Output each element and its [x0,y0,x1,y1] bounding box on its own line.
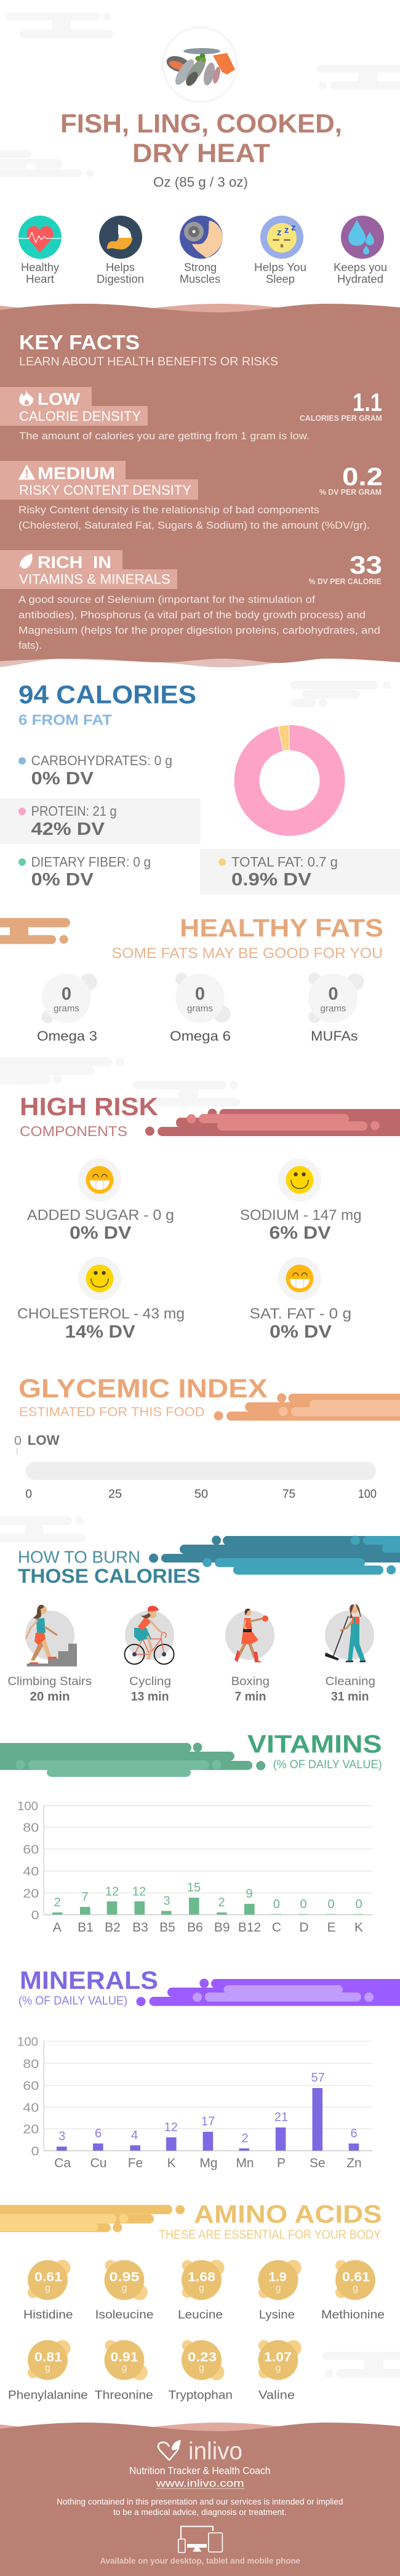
fact: low calorie density: CALORIES PER GRAM [300,414,382,423]
gauge axis: 100 [358,1488,377,1501]
bar chart: minerals: 6 [95,2127,102,2140]
panel: calories [0,680,400,895]
benefit icons row [18,216,387,285]
risk: added sugar: 0% DV [70,1224,132,1243]
amino: phenylalanine: g [45,2363,50,2373]
bar chart: minerals: Se [310,2156,326,2170]
bar chart: vitamins: C [272,1920,281,1935]
macro: dietary fiber: DIETARY FIBER: 0 g [31,854,151,869]
heading: high risk [20,1092,158,1139]
bar chart: vitamins: 7 [81,1890,89,1904]
fat: omega 3: grams [54,1004,79,1014]
bar chart: minerals: P [277,2156,286,2170]
bar chart: minerals: 4 [131,2129,138,2142]
icon: hydrated: Keeps you [334,261,387,274]
macro: protein [0,798,201,844]
bar chart: vitamins: B12 [238,1920,261,1935]
fact: medium risky content density: MEDIUM [38,463,115,483]
fat: omega 3: 0 [62,984,71,1004]
macro: total fat [200,849,400,895]
heading: vitamins [247,1729,382,1771]
bar chart: vitamins: 12 [132,1885,146,1898]
panel: amino acids [0,2200,385,2402]
fact: low calorie density [0,387,382,442]
exercise: boxing: Boxing [231,1675,270,1688]
bar chart: minerals: 100 [17,2036,38,2049]
bar chart: minerals [17,2036,372,2170]
risk: saturated fat [250,1257,351,1342]
fact: medium risky content density: 0.2 [342,462,383,490]
fact: rich in vitamins and minerals: A good source of Selenium (important for the stimulation of [18,595,315,606]
amino: tryptophan: g [199,2363,204,2373]
exercise: cleaning: Cleaning [326,1675,375,1688]
tagline: Nutrition Tracker & Health Coach [129,2465,271,2476]
heading: amino acids: AMINO ACIDS [194,2200,382,2228]
heading: how to burn: HOW TO BURN [18,1548,140,1567]
disclaimer: to be a medical advice, diagnosis or treatment. [113,2508,287,2517]
bar chart: vitamins: 9 [246,1887,253,1901]
heading: healthy fats: HEALTHY FATS [180,914,383,942]
amino: phenylalanine: Phenylalanine [8,2389,88,2402]
amino: threonine: 0.91 [111,2350,138,2365]
bar chart: vitamins: B2 [105,1920,121,1935]
amino: isoleucine: 0.95 [110,2270,140,2285]
amino: histidine: Histidine [23,2309,73,2322]
heading: high risk: HIGH RISK [20,1092,158,1121]
heading decoration [137,1979,400,2006]
bar chart: vitamins: A [53,1920,62,1935]
amino: histidine: g [45,2283,50,2293]
fact: rich in vitamins and minerals: RICH IN [38,553,111,572]
bar chart: minerals: Ca [54,2156,71,2170]
heading: 94 calories: 94 CALORIES [18,680,196,709]
bar chart: vitamins: D [299,1920,309,1935]
amino: isoleucine: Isoleucine [95,2309,154,2322]
bar chart: minerals: Fe [128,2156,143,2170]
risk: sodium: 6% DV [269,1224,331,1243]
heading: key facts: LEARN ABOUT HEALTH BENEFITS OR RISKS [19,356,278,368]
icon: digestion: Helps [106,261,135,274]
fact: low calorie density: The amount of calories you are getting from 1 gram is low. [19,431,310,442]
title [60,109,342,168]
risk: saturated fat: SAT. FAT - 0 g [250,1306,351,1322]
amino: methionine [321,2260,385,2322]
heading: vitamins: VITAMINS [247,1729,382,1758]
risk: cholesterol [17,1257,185,1342]
heading decoration [0,918,70,944]
panel: how to burn those calories [7,1535,400,1704]
macro: carbohydrates [18,753,172,789]
risk: added sugar [27,1158,174,1243]
bar chart: minerals: 0 [31,2145,39,2158]
fact: medium risky content density: % DV PER GRAM [319,488,382,497]
fact: low calorie density: 1.1 [353,388,382,416]
macro: carbohydrates: CARBOHYDRATES: 0 g [31,753,172,768]
macro: total fat: 0.9% DV [231,870,312,890]
exercise: boxing: 7 min [234,1690,266,1704]
heading: how to burn [18,1548,201,1587]
bar chart: vitamins: 0 [273,1898,280,1911]
title: FISH, LING, COOKED, [60,109,342,139]
panel: high risk components [17,1092,400,1342]
heading decoration [149,1535,400,1575]
amino: threonine: Threonine [95,2389,153,2402]
fact: rich in vitamins and minerals [0,550,382,651]
heading: minerals: MINERALS [20,1966,158,1994]
gauge axis: 75 [282,1488,295,1501]
heading decoration [214,1394,400,1421]
amino: tryptophan: Tryptophan [169,2389,233,2402]
bar chart: minerals: K [167,2156,176,2170]
amino: phenylalanine [8,2340,88,2402]
heading: high risk: COMPONENTS [20,1123,127,1139]
bar chart: vitamins: B9 [214,1920,230,1935]
exercise: cleaning: 31 min [331,1690,369,1704]
panel: vitamins [0,1729,382,1935]
fact: medium risky content density [0,461,383,531]
header image: plate of fish [162,27,238,102]
icon: warning triangle [18,465,35,479]
icon: sleep: z [291,222,295,233]
bar chart: vitamins: 0 [31,1909,39,1922]
disclaimer [57,2497,343,2517]
bar chart: vitamins: B5 [159,1920,175,1935]
exercise: climbing stairs: 20 min [30,1690,70,1704]
fact: rich in vitamins and minerals: Magnesium (helps for the proper digestion proteins, carbohydrates, and [18,625,380,636]
donut chart [247,725,332,823]
bar chart: minerals: 3 [58,2130,65,2143]
bar chart: vitamins: 2 [218,1896,225,1909]
bar chart: minerals: Mn [236,2156,254,2170]
risk: added sugar: ADDED SUGAR - 0 g [27,1207,174,1224]
bar chart: vitamins: K [354,1920,363,1935]
bar chart: minerals: Cu [90,2156,106,2170]
macro: carbohydrates: 0% DV [31,769,94,789]
amino: isoleucine: g [122,2283,127,2293]
heading: 94 calories [18,680,196,729]
heading: glycemic index [18,1374,268,1420]
amino: tryptophan [169,2340,233,2402]
exercise: cycling: Cycling [129,1675,171,1688]
bar chart: vitamins: 100 [17,1800,38,1813]
bar chart: vitamins: 0 [327,1898,335,1911]
amino: lysine: 1.9 [268,2270,287,2285]
amino: methionine: g [353,2283,358,2293]
macro: total fat: TOTAL FAT: 0.7 g [231,854,338,869]
heading: minerals: (% OF DAILY VALUE) [18,1995,127,2008]
fact: rich in vitamins and minerals: fats). [18,640,42,651]
exercise: cycling: 13 min [131,1690,169,1704]
heading: key facts: KEY FACTS [19,331,140,354]
risk: saturated fat: 0% DV [270,1322,332,1342]
amino: leucine: g [199,2283,204,2293]
amino: histidine [23,2260,73,2322]
bar chart: vitamins: 0 [355,1898,362,1911]
bar chart: minerals: 20 [23,2123,39,2137]
heading: vitamins: (% OF DAILY VALUE) [273,1758,382,1771]
bar chart: vitamins: 2 [54,1896,61,1909]
bar chart: minerals: 17 [201,2115,215,2129]
heading: amino acids: THESE ARE ESSENTIAL FOR YOUR BODY [159,2229,381,2242]
amino: valine [258,2340,302,2402]
macro: protein: 42% DV [31,819,105,839]
exercise: boxing [225,1609,274,1704]
logo: inlivo [158,2438,242,2465]
icon: sleep: z [284,225,289,235]
gauge axis: 25 [108,1488,122,1501]
icon: flame [19,390,33,406]
gauge axis: 50 [194,1488,208,1501]
heading decoration [145,1109,400,1136]
macro: dietary fiber: 0% DV [31,870,94,890]
amino: leucine: 1.68 [188,2270,215,2285]
risk: sodium [240,1158,362,1243]
icon: sleep: Helps You [254,261,306,274]
amino: leucine: Leucine [178,2309,223,2322]
icon: digestion [97,216,144,285]
amino: valine: g [276,2363,281,2373]
fat: mufas [308,973,364,1044]
exercise: climbing stairs: Climbing Stairs [7,1675,92,1688]
panel: healthy fats [0,914,383,1044]
exercise: cleaning [325,1604,375,1704]
panel: minerals [17,1966,400,2170]
gauge marker: 0 [14,1434,22,1448]
icon: leaf [20,554,32,569]
amino: tryptophan: 0.23 [188,2350,217,2365]
icon: hydrated: Hydrated [337,273,383,285]
bar chart: minerals: 60 [23,2079,39,2093]
amino: threonine: g [122,2363,127,2373]
amino: valine: Valine [258,2389,295,2402]
fact: rich in vitamins and minerals: VITAMINS & MINERALS [19,572,170,587]
bar chart: vitamins: 20 [23,1887,39,1901]
bar chart: vitamins: 80 [23,1821,39,1835]
bar chart: vitamins: 15 [187,1881,201,1895]
amino: phenylalanine: 0.81 [34,2350,62,2365]
fact: low calorie density: LOW [38,389,81,408]
icon: healthy heart: Healthy [21,261,59,274]
footer [0,2423,400,2576]
risk: cholesterol: 14% DV [65,1322,135,1342]
heading: 94 calories: 6 FROM FAT [18,712,112,729]
gauge marker [14,1432,60,1455]
website link: www.inlivo.com [155,2477,244,2489]
gauge bar [26,1462,376,1480]
heading: minerals [18,1966,158,2008]
icon: sleep: Sleep [266,273,295,285]
logo: inlivo: inlivo [188,2438,242,2465]
gauge axis [26,1488,377,1501]
fat: omega 6: grams [187,1004,213,1014]
amino: threonine [95,2340,153,2402]
heading: how to burn: THOSE CALORIES [18,1565,201,1587]
heading: key facts [19,331,278,368]
bar chart: vitamins: 12 [105,1885,119,1898]
bar chart: minerals: 12 [164,2121,178,2134]
fact: rich in vitamins and minerals: antibodies), Phosphorus (a vital part of the body growth process) and [18,610,366,621]
panel: key facts [0,304,400,667]
macro: protein: PROTEIN: 21 g [31,803,117,819]
availability note: Available on your desktop, tablet and mobile phone [100,2556,300,2566]
fact: rich in vitamins and minerals: 33 [350,551,382,579]
bar chart: minerals: 21 [274,2111,288,2124]
amino: valine: 1.07 [264,2350,292,2365]
bar chart: minerals: Mg [199,2156,218,2170]
bar chart: vitamins [17,1800,372,1935]
amino: methionine: Methionine [321,2309,385,2322]
bar chart: minerals: 57 [311,2071,325,2085]
gauge marker: LOW [28,1432,60,1448]
fact: medium risky content density: (Cholesterol, Saturated Fat, Sugars & Sodium) to the amount (%DV/gr). [18,520,370,531]
amino: leucine [178,2260,225,2322]
bar chart: minerals: 6 [350,2127,358,2140]
bar chart: vitamins: 60 [23,1843,39,1857]
fact: medium risky content density: RISKY CONTENT DENSITY [19,482,191,498]
fat: mufas: MUFAs [311,1028,358,1044]
fat: mufas: grams [320,1004,346,1014]
macro: dietary fiber [18,854,151,890]
heading: amino acids [159,2200,382,2242]
bar chart: minerals: 40 [23,2101,39,2115]
bar chart: minerals: 80 [23,2058,39,2071]
bar chart: vitamins: 0 [300,1898,307,1911]
heading decoration [0,2205,185,2232]
risk: sodium: SODIUM - 147 mg [240,1207,362,1224]
icon: strong muscles [180,216,223,285]
icon: healthy heart: Heart [26,273,54,285]
exercise: climbing stairs [7,1605,92,1704]
heading: healthy fats [112,914,383,962]
fat: mufas: 0 [328,984,338,1004]
panel: glycemic index [14,1374,400,1501]
amino: histidine: 0.61 [34,2270,62,2285]
bar chart: minerals: 2 [241,2132,249,2145]
amino: lysine: Lysine [259,2309,295,2322]
bar chart: vitamins: E [327,1920,336,1935]
bar chart: vitamins: B3 [132,1920,148,1935]
exercise: cycling [124,1606,174,1704]
risk: cholesterol: CHOLESTEROL - 43 mg [17,1306,185,1322]
fat: omega 6 [170,973,231,1044]
amino: methionine: 0.61 [342,2270,370,2285]
icon: healthy heart [18,216,62,285]
bar chart: vitamins: 3 [163,1894,170,1908]
heading: glycemic index: ESTIMATED FOR THIS FOOD [19,1405,204,1420]
icon: hydrated [334,216,387,285]
heading: glycemic index: GLYCEMIC INDEX [18,1374,268,1404]
icon: sleep: z [277,227,282,238]
serving size: Oz (85 g / 3 oz) [153,174,248,190]
fat: omega 6: Omega 6 [170,1028,231,1044]
fact: low calorie density: CALORIE DENSITY [19,408,141,424]
icon: sleep [254,216,306,285]
gauge axis: 0 [26,1488,32,1501]
disclaimer: Nothing contained in this presentation and our services is intended or implied [57,2497,343,2506]
fat: omega 3: Omega 3 [37,1028,97,1044]
bar chart: minerals: Zn [346,2156,362,2170]
title: DRY HEAT [132,139,270,168]
icon: digestion: Digestion [97,273,144,285]
bar chart: vitamins: 40 [23,1865,39,1879]
icon: strong muscles: Muscles [180,273,220,285]
amino: lysine [258,2260,302,2322]
fat: omega 3 [37,973,97,1044]
bar chart: vitamins: B6 [187,1920,203,1935]
fact: rich in vitamins and minerals: % DV PER CALORIE [309,577,382,586]
bar chart: vitamins: B1 [78,1920,94,1935]
heading: healthy fats: SOME FATS MAY BE GOOD FOR YOU [112,945,383,962]
fact: medium risky content density: Risky Content density is the relationship of bad components [18,505,319,516]
icon: devices [178,2526,222,2553]
heading decoration [0,1742,265,1777]
icon: strong muscles: Strong [184,261,217,274]
fat: omega 6: 0 [195,984,205,1004]
amino: lysine: g [276,2283,281,2293]
amino: isoleucine [95,2260,154,2322]
